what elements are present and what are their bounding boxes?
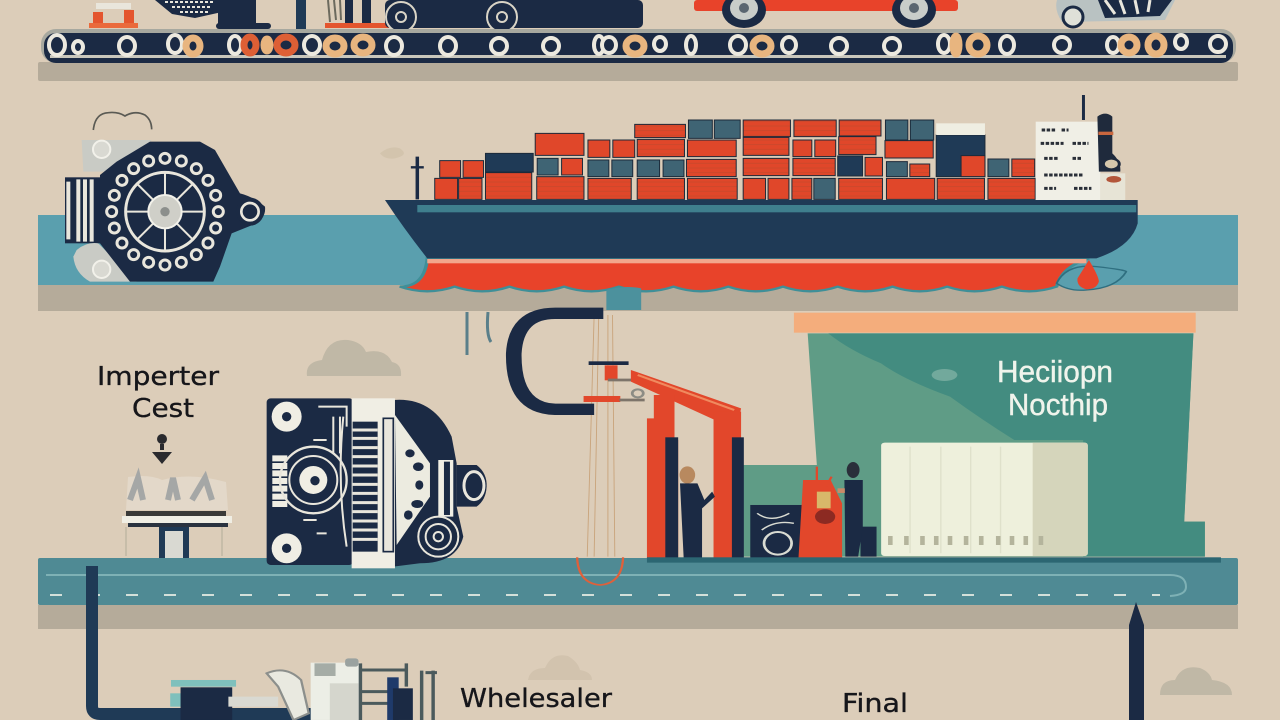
heading: cost: Cest — [132, 394, 194, 424]
worker left — [680, 466, 715, 558]
warehouse wall — [743, 333, 1205, 557]
cloud right — [1160, 667, 1232, 695]
panel: importer cost label — [97, 362, 232, 565]
hook drips — [467, 312, 491, 355]
icon: large alternator — [267, 398, 487, 568]
arrow pointing down — [152, 434, 172, 464]
items riding on the conveyor — [89, 0, 1175, 32]
quay ledge — [38, 285, 1238, 311]
panel: factory conveyor belt — [38, 0, 1238, 81]
ship hull — [385, 200, 1138, 291]
faint cloud — [528, 655, 592, 680]
panel: port road band — [38, 558, 1238, 629]
worker — [325, 0, 440, 28]
warehouse title line one: Heciiopn — [997, 354, 1113, 389]
alternator on stand — [155, 0, 306, 29]
icon: wholesaler machinery — [170, 658, 437, 720]
panel: sea freight band — [38, 215, 1238, 311]
navy car — [385, 0, 643, 32]
bridge tower with window text — [1036, 95, 1125, 201]
road shadow ledge — [38, 605, 1238, 629]
white storage block — [881, 443, 1088, 556]
road inner edge line — [46, 575, 1186, 596]
water band — [38, 215, 1238, 285]
icon: top alternator — [65, 112, 265, 282]
conveyor rollers — [49, 35, 1226, 55]
engine crate — [750, 505, 803, 558]
red truck — [694, 0, 958, 28]
grey machine — [1056, 0, 1175, 27]
warehouse title line two: Nocthip — [1008, 387, 1108, 422]
teal outfall pipe — [606, 287, 641, 310]
heading: importer: Imperter — [97, 362, 219, 392]
conveyor shadow ledge — [38, 62, 1238, 81]
faint cloud behind bow — [380, 147, 404, 159]
bow mast — [411, 157, 424, 199]
road edge — [647, 557, 1221, 563]
basket at rope end — [577, 557, 623, 585]
panel: port crane and warehouse — [514, 313, 1221, 585]
rigging lines — [587, 315, 615, 557]
label: warehouse title — [997, 354, 1113, 422]
label: final: Final — [842, 689, 908, 719]
conveyor belt body — [41, 29, 1236, 63]
red machine — [798, 467, 842, 558]
label: wholesaler: Whelesaler — [460, 684, 612, 714]
cloud — [307, 340, 401, 376]
orange crate — [89, 3, 138, 28]
illustration: container ship — [380, 95, 1138, 310]
table of figures — [122, 476, 232, 565]
worker right — [838, 462, 863, 557]
stacked containers — [435, 120, 1035, 199]
arrow: left pipe down to wholesaler — [92, 566, 330, 714]
arrow: right spike up to road — [1129, 602, 1144, 720]
crane — [584, 361, 744, 558]
dark case — [860, 527, 877, 557]
road dashes — [50, 594, 1160, 596]
navy hook — [514, 313, 603, 409]
road — [38, 558, 1238, 605]
warehouse roof band — [794, 313, 1196, 333]
